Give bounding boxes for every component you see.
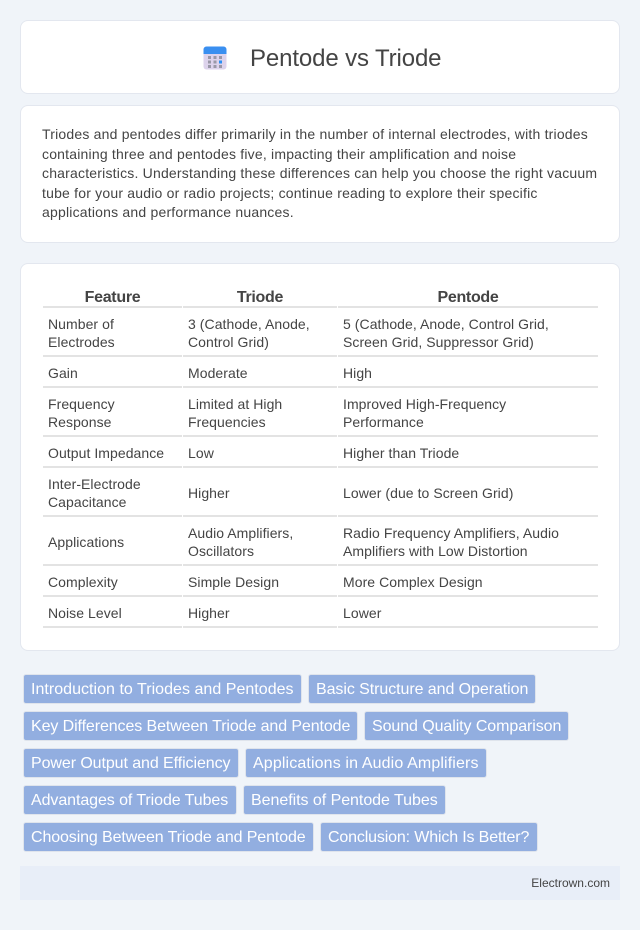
row: inter-electrode capacitance (48, 476, 513, 510)
tag (245, 748, 487, 778)
row: output impedance: Output Impedance (48, 445, 164, 461)
row: complexity: Complexity (48, 574, 118, 590)
row: applications (48, 525, 559, 559)
tag (320, 822, 538, 852)
intro text: Triodes and pentodes differ primarily in the number of internal electrodes, with triodes (42, 126, 588, 142)
tag (308, 674, 536, 704)
row: noise level: Noise Level (48, 605, 122, 621)
tag (23, 822, 314, 852)
row: number of electrodes: Electrodes (48, 334, 115, 350)
tag (23, 748, 239, 778)
row: applications: Audio Amplifiers, (188, 525, 293, 541)
table header (85, 289, 499, 306)
row: frequency response: Frequency (48, 396, 115, 412)
row: output impedance: Higher than Triode (343, 445, 459, 461)
tag: Power Output and Efficiency (31, 755, 230, 772)
row: gain (48, 365, 372, 381)
intro text: applications and performance nuances. (42, 204, 294, 220)
table header: Feature (85, 289, 140, 306)
row: inter-electrode capacitance: Capacitance (48, 494, 126, 510)
tag: Basic Structure and Operation (316, 681, 528, 698)
tag (23, 711, 358, 741)
table header: Triode (237, 289, 283, 306)
row: gain: Gain (48, 365, 78, 381)
intro text (42, 126, 597, 220)
row: noise level: Lower (343, 605, 381, 621)
tag: Advantages of Triode Tubes (31, 792, 228, 809)
row: noise level (48, 605, 382, 621)
row: frequency response (48, 396, 506, 430)
tag: Benefits of Pentode Tubes (251, 792, 438, 809)
tag (243, 785, 446, 815)
row: applications: Applications (48, 534, 124, 550)
tag (23, 785, 237, 815)
row: applications: Amplifiers with Low Distortion (343, 543, 528, 559)
title: Pentode vs Triode (250, 45, 441, 72)
row: gain: Moderate (188, 365, 248, 381)
tag: Applications in Audio Amplifiers (253, 755, 479, 772)
row: complexity (48, 574, 483, 590)
comparison table panel (20, 263, 620, 651)
intro panel (20, 105, 620, 243)
tag: Key Differences Between Triode and Pentode (31, 718, 350, 735)
tag: Introduction to Triodes and Pentodes (31, 681, 294, 698)
row: frequency response: Limited at High (188, 396, 282, 412)
tag: Sound Quality Comparison (372, 718, 561, 735)
tag: Conclusion: Which Is Better? (328, 829, 529, 846)
tag: Choosing Between Triode and Pentode (31, 829, 306, 846)
row: inter-electrode capacitance: Higher (188, 485, 230, 501)
row: complexity: Simple Design (188, 574, 279, 590)
intro text: containing three and pentodes five, impacting their amplification and noise (42, 146, 516, 162)
row: applications: Oscillators (188, 543, 254, 559)
row: frequency response: Response (48, 414, 112, 430)
row: gain: High (343, 365, 372, 381)
row: frequency response: Improved High-Frequency (343, 396, 506, 412)
title card (20, 20, 620, 94)
topic tags (23, 674, 569, 852)
table header: Pentode (437, 289, 499, 306)
row: frequency response: Performance (343, 414, 424, 430)
icon: calendar (204, 46, 226, 70)
row: inter-electrode capacitance: Lower (due to Screen Grid) (343, 485, 513, 501)
row: number of electrodes: Control Grid) (188, 334, 269, 350)
row: inter-electrode capacitance: Inter-Electrode (48, 476, 141, 492)
row: number of electrodes: 5 (Cathode, Anode, Control Grid, (343, 316, 549, 332)
tag (364, 711, 569, 741)
row: noise level: Higher (188, 605, 230, 621)
row: output impedance (48, 445, 459, 461)
row: number of electrodes (48, 316, 549, 350)
row: number of electrodes: 3 (Cathode, Anode, (188, 316, 310, 332)
footer (20, 866, 620, 900)
footer credit: Electrown.com (531, 876, 610, 890)
intro text: characteristics. Understanding these differences can help you choose the right vacuum (42, 165, 597, 181)
row: number of electrodes: Screen Grid, Suppressor Grid) (343, 334, 534, 350)
row: number of electrodes: Number of (48, 316, 114, 332)
row: applications: Radio Frequency Amplifiers, Audio (343, 525, 559, 541)
row: complexity: More Complex Design (343, 574, 483, 590)
intro text: tube for your audio or radio projects; continue reading to explore their specific (42, 185, 538, 201)
row: output impedance: Low (188, 445, 214, 461)
tag (23, 674, 302, 704)
row: frequency response: Frequencies (188, 414, 266, 430)
